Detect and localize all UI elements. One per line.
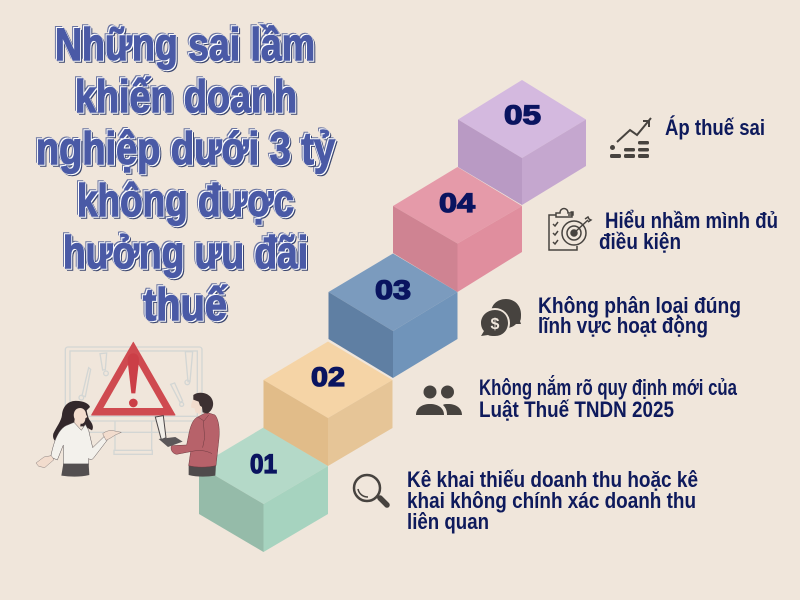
title: Những sai lầm [55,19,315,70]
man with laptop [155,393,219,477]
title: thuế [143,279,228,330]
title: không được [77,175,294,226]
label 02: Luật Thuế TNDN 2025 [479,397,674,422]
icon: two people [416,386,462,415]
icon: money chat bubbles [480,299,521,338]
title: nghiệp dưới 3 tỷ [36,123,335,174]
label 02 [479,375,738,422]
label 04: điều kiện [599,229,681,254]
label 05: Áp thuế sai [665,115,765,140]
step 03 cube: 03 [375,275,411,305]
label 03 [538,293,741,338]
label 03: Không phân loại đúng [538,293,741,318]
icon: clipboard with target [549,208,591,250]
monitor [65,347,202,454]
step 04 cube: 04 [439,188,475,218]
step 04 cube [393,167,522,292]
title: khiến doanh [75,71,297,122]
step 05 cube: 05 [504,100,541,130]
step 05 cube [458,80,586,205]
step 02 cube [264,342,392,466]
warning triangle [92,342,175,415]
label 04 [599,208,778,254]
step 02 cube: 02 [311,362,345,392]
step 03 cube [328,254,458,378]
step 01 cube [199,428,328,552]
woman [36,401,121,477]
label 03: lĩnh vực hoạt động [538,313,708,338]
label 01: Kê khai thiếu doanh thu hoặc kê [407,467,698,492]
title: hưởng ưu đãi [63,227,308,278]
icon: magnifying glass [354,475,387,505]
label 01: khai không chính xác doanh thu [407,488,696,513]
title [36,19,335,330]
icon: rising trend chart [610,118,651,158]
icon: money chat bubbles: $ [491,316,500,333]
illustration: warning on monitor with two people [36,342,219,477]
label 01: liên quan [407,509,489,534]
label 01 [407,467,698,534]
step 01 cube: 01 [250,449,277,479]
